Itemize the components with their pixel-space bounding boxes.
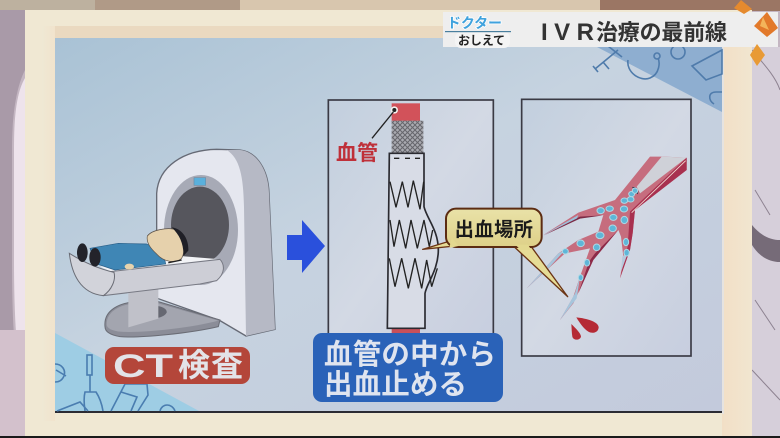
graft: [387, 153, 438, 328]
pointer: [372, 106, 398, 138]
caption: stop bleeding from inside the vessel: [313, 333, 503, 402]
title text: [541, 19, 727, 46]
base and pedestal: [105, 287, 220, 337]
blue panel: [55, 38, 722, 413]
branching vessels: [527, 157, 687, 320]
gold diamonds: [734, 0, 778, 66]
vessel top: [392, 103, 420, 122]
caption: stop bleeding from inside the vessel: 血管の中から: [324, 339, 496, 371]
vessel label: 血管: [336, 142, 378, 165]
title text: 治療の最前線: [596, 20, 727, 45]
series logo: [445, 15, 511, 48]
title bar: [443, 12, 778, 48]
caption: stop bleeding from inside the vessel: 出血止める: [324, 369, 467, 401]
vessel bottom: [392, 327, 420, 334]
corner decoration: bottom left medical icons: [55, 333, 199, 411]
corner decoration: top right medical icons: [593, 45, 722, 112]
blood drops: [571, 317, 599, 340]
CT label: [105, 347, 250, 384]
series logo: おしえて: [458, 34, 505, 48]
CT scanner illustration: [69, 149, 275, 337]
CT label: 検査: [178, 347, 243, 383]
frame: [522, 99, 691, 356]
gantry: [157, 149, 275, 336]
bleeding site callout: 出血場所: [455, 219, 533, 241]
arrow: [287, 220, 325, 273]
panel: vessel diagram: [522, 99, 691, 356]
panel: stent diagram: [328, 100, 493, 340]
blood cells: [562, 188, 638, 281]
mesh stent: [392, 121, 423, 153]
frame: [328, 100, 493, 340]
title text: IVR: [541, 19, 594, 46]
bleeding site callout: [423, 209, 568, 297]
series logo: ドクター: [447, 15, 502, 31]
CT label: CT: [113, 348, 174, 384]
table: [69, 253, 223, 296]
patient: [77, 227, 188, 270]
